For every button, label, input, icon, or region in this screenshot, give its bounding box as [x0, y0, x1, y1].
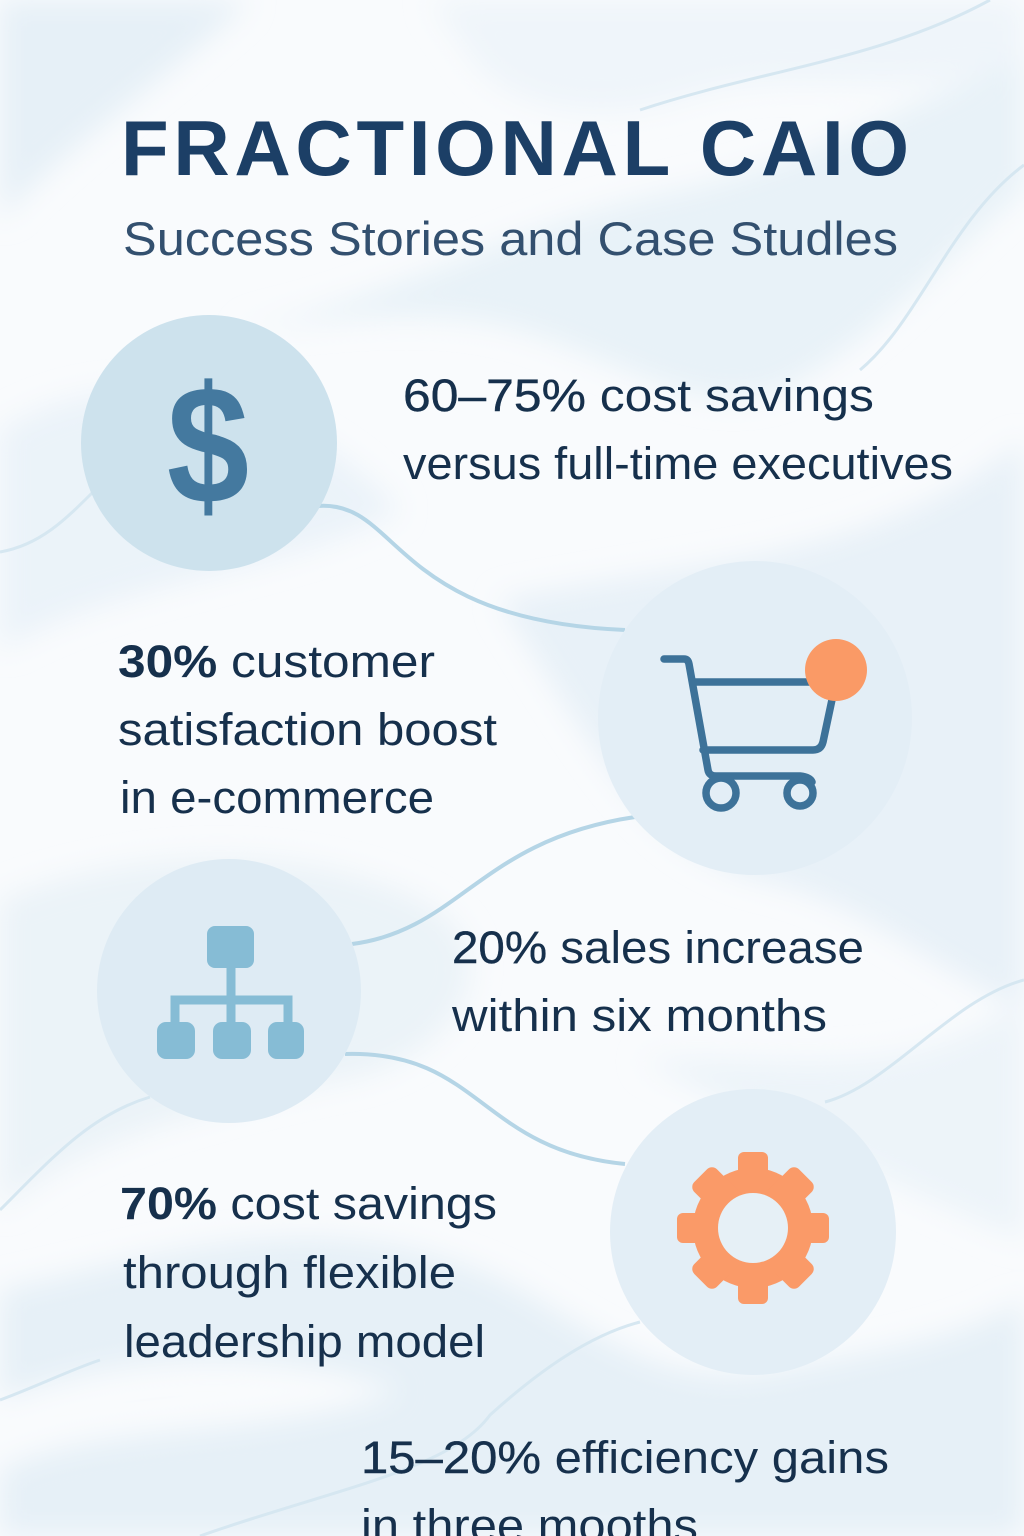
stat: 60–75% cost savings — [403, 370, 953, 489]
stat: 60–75% cost savings: 60–75% cost savings — [403, 370, 874, 421]
subtitle: Success Stories and Case Studles — [123, 212, 898, 265]
connector: dollar to cart — [318, 506, 625, 630]
stat: 30% customer satisfaction: in e-commerce — [120, 772, 434, 823]
icon: dollar — [81, 315, 337, 571]
stat: 20% sales increase: within six months — [451, 990, 827, 1041]
stat: 20% sales increase — [451, 922, 864, 1041]
title: FRACTIONAL CAIO — [121, 104, 909, 192]
stat: 15–20% efficiency gains: 15–20% efficiency gains — [361, 1432, 889, 1483]
stat: 70% cost savings: 70% cost savings — [120, 1178, 497, 1229]
stat: 60–75% cost savings: versus full-time executives — [403, 438, 953, 489]
stat: 70% cost savings: leadership model — [124, 1316, 485, 1367]
icon: gear — [610, 1089, 896, 1375]
icon: dollar: $ — [167, 351, 249, 539]
stat: 70% cost savings: through flexible — [123, 1247, 456, 1298]
icon: network hierarchy — [97, 859, 361, 1123]
stat: 70% cost savings — [120, 1178, 497, 1367]
stat: 15–20% efficiency gains — [361, 1432, 889, 1536]
connector: network to gear — [345, 1054, 625, 1164]
connector: cart to network — [352, 817, 635, 944]
icon: shopping cart — [598, 561, 912, 875]
stat: 20% sales increase: 20% sales increase — [452, 922, 864, 973]
stat: 30% customer satisfaction: satisfaction boost — [118, 704, 498, 755]
stat: 30% customer satisfaction: 30% customer — [118, 636, 435, 687]
stat: 30% customer satisfaction — [118, 636, 498, 823]
